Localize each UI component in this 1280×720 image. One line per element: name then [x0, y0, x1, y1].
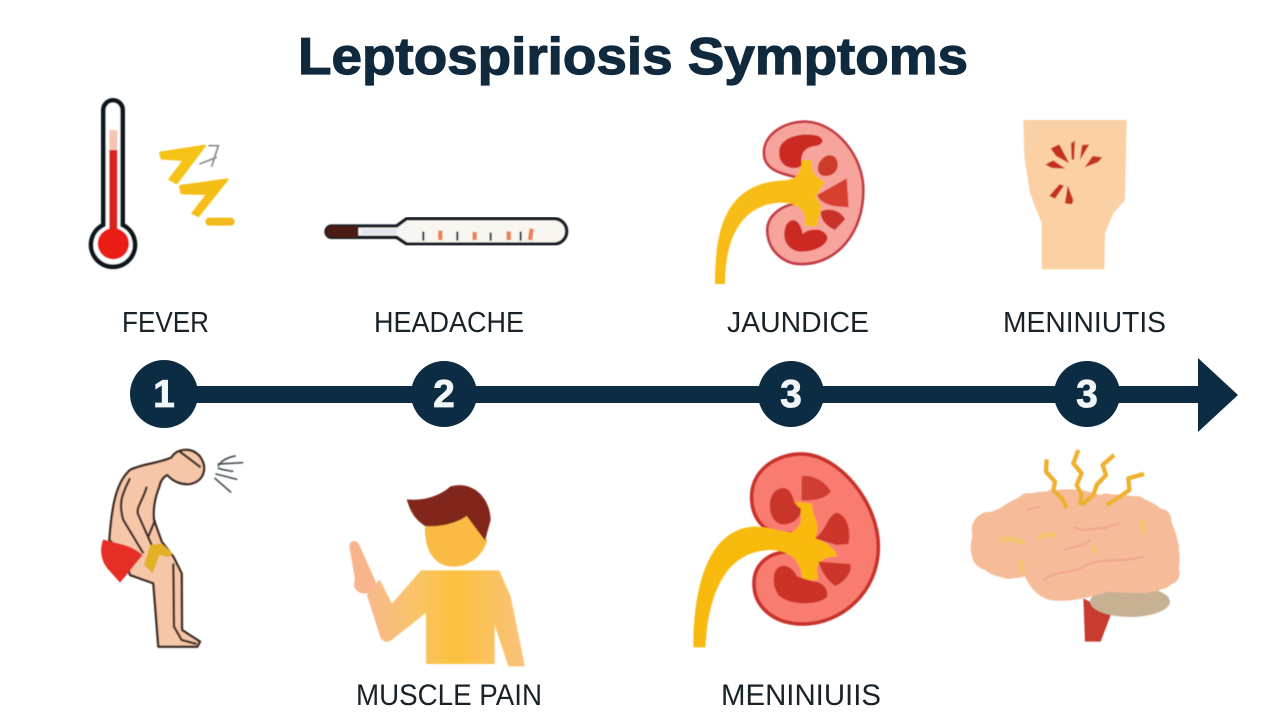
icon: bent-over man with body aches [101, 450, 243, 647]
label: MENINIUTIS lower: MENINIUIIS [721, 679, 881, 712]
marker 1 [130, 360, 198, 428]
icon: skin patch with red rash [1023, 120, 1127, 269]
icon: person with muscle pain [349, 485, 523, 665]
icon: kidney lower [693, 454, 878, 647]
label: FEVER: FEVER [122, 307, 209, 339]
marker 3: 3 [780, 373, 802, 416]
marker 3 [758, 361, 824, 427]
icon: upright thermometer with heat marks [91, 100, 231, 267]
marker 2 [411, 361, 477, 427]
icon: brain with yellow radiating lines [971, 450, 1180, 642]
label: MENINIUTIS upper: MENINIUTIS [1003, 307, 1166, 339]
label: JAUNDICE: JAUNDICE [727, 307, 869, 339]
label: MUSCLE PAIN: MUSCLE PAIN [356, 679, 542, 712]
icon: horizontal thermometer [326, 219, 567, 244]
label: HEADACHE: HEADACHE [374, 307, 524, 339]
marker 3 second [1054, 361, 1120, 427]
marker 1: 1 [153, 373, 175, 416]
timeline with arrow and numbered markers [130, 358, 1238, 432]
marker 3 second: 3 [1076, 373, 1098, 416]
title: Leptospiriosis Symptoms [298, 28, 968, 86]
marker 2: 2 [433, 373, 455, 416]
icon: kidney with yellow ureter (jaundice) [715, 122, 863, 284]
